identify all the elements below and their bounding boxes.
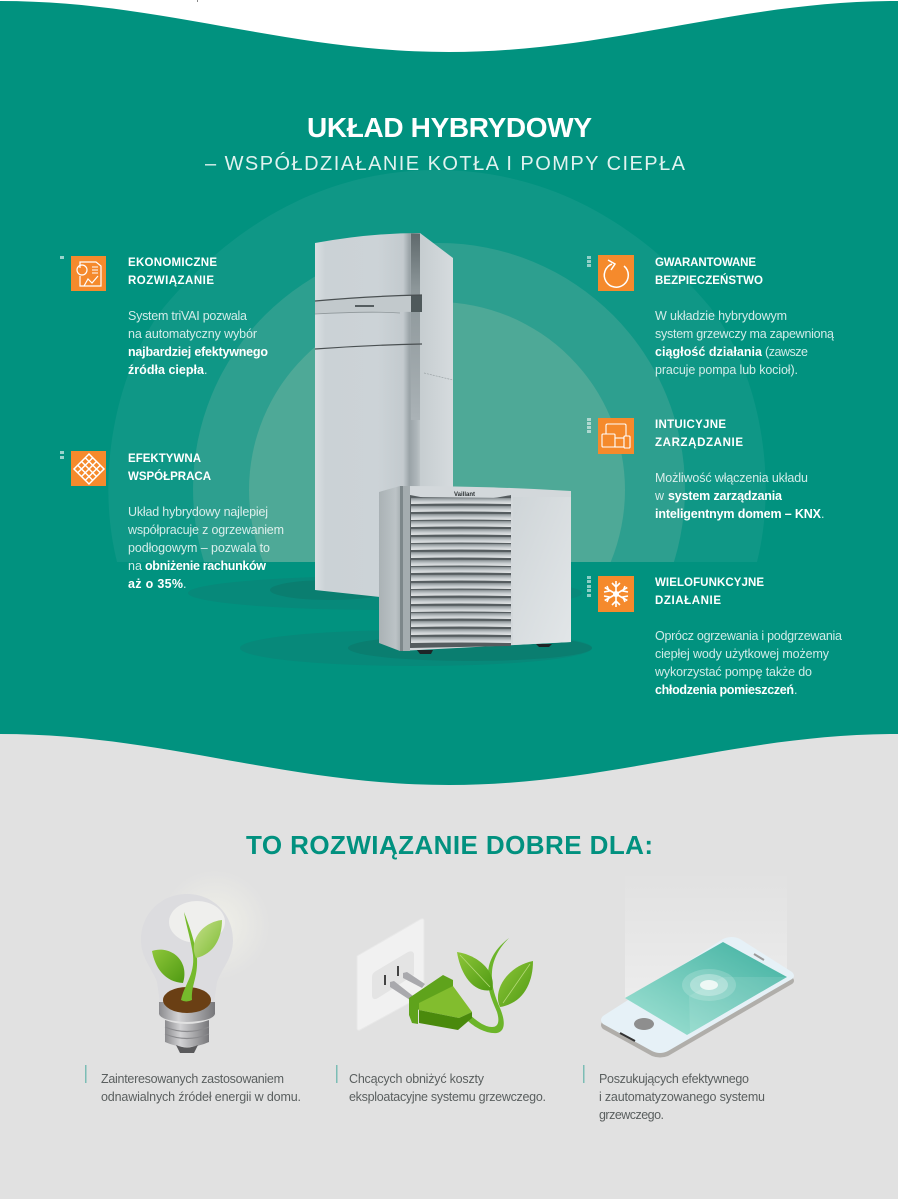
text block: ciepłej wody użytkowej możemy [655, 647, 830, 661]
text block: (zawsze [765, 345, 808, 359]
text block: automated system: Poszukujących efektywnego [599, 1072, 749, 1086]
text block [654, 629, 842, 697]
text block: współpracuje z ogrzewaniem [127, 523, 284, 537]
text block: obniżenie rachunków [145, 559, 266, 573]
text block: źródła ciepła [128, 363, 205, 377]
heading [128, 257, 217, 287]
heading: DZIAŁANIE [655, 595, 721, 607]
text block: wykorzystać pompę także do [654, 665, 812, 679]
text block: aż o 35% [128, 577, 183, 591]
text block: W układzie hybrydowym [655, 309, 787, 323]
heading: good for: TO ROZWIĄZANIE DOBRE DLA: [246, 830, 653, 860]
text block: najbardziej efektywnego [128, 345, 268, 359]
text block: Możliwość włączenia układu [655, 471, 808, 485]
text block: podłogowym – pozwala to [128, 541, 270, 555]
text block: renewable energy: odnawialnych źródeł energii w domu. [101, 1090, 301, 1104]
boiler unit [315, 233, 453, 600]
icon: snowflake [587, 576, 634, 612]
text block [654, 471, 824, 521]
icon: floor heating grid [60, 451, 106, 486]
text block: pracuje pompa lub kocioł). [655, 363, 798, 377]
text block: chłodzenia pomieszczeń [655, 683, 794, 697]
panel: green hybrid system section [0, 0, 898, 785]
text block: automated system [583, 1065, 765, 1122]
heading [655, 419, 743, 449]
text block: . [794, 683, 797, 697]
text block [655, 309, 834, 377]
text block [128, 309, 268, 377]
text block: renewable energy: Zainteresowanych zastosowaniem [101, 1072, 284, 1086]
heat pump unit [379, 486, 571, 654]
text block: Oprócz ogrzewania i podgrzewania [655, 629, 842, 643]
title [205, 112, 686, 175]
text block: w [654, 489, 665, 503]
title: – WSPÓŁDZIAŁANIE KOTŁA I POMPY CIEPŁA [205, 152, 686, 175]
text block: system grzewczy ma zapewnioną [655, 327, 834, 341]
icon: document with charts [60, 256, 106, 291]
concentric background arcs [108, 170, 766, 562]
text block: automated system: grzewczego. [599, 1108, 664, 1122]
heading: WIELOFUNKCYJNE [655, 577, 764, 589]
panel: multifunctional operation [587, 576, 842, 697]
icon: light bulb with plant [141, 870, 270, 1053]
panel: intuitive management [587, 418, 824, 521]
text block: ciągłość działania [655, 345, 763, 359]
panel: guaranteed safety [587, 255, 834, 377]
heading: WSPÓŁPRACA [128, 470, 211, 483]
text block: lower costs: Chcących obniżyć koszty [349, 1072, 485, 1086]
floor shadows [188, 576, 592, 666]
text block: . [821, 507, 824, 521]
text block: system zarządzania [668, 489, 783, 503]
heading: BEZPIECZEŃSTWO [655, 274, 763, 287]
text block: lower costs: eksploatacyjne systemu grzewczego. [349, 1090, 546, 1104]
text block [127, 505, 284, 591]
heading: GWARANTOWANE [655, 257, 756, 269]
text block: . [183, 577, 186, 591]
heading [655, 257, 763, 287]
heading: INTUICYJNE [655, 419, 726, 431]
panel: effective cooperation [60, 451, 284, 591]
heading: ZARZĄDZANIE [655, 437, 743, 449]
heading [128, 453, 211, 483]
heading: EKONOMICZNE [128, 257, 217, 269]
panel: economical solution [60, 256, 268, 377]
heading [655, 577, 764, 607]
text block: automated system: i zautomatyzowanego systemu [599, 1090, 765, 1104]
icon: circular arrow [587, 255, 634, 291]
icon: plug with leaves [357, 919, 533, 1033]
text block: Układ hybrydowy najlepiej [128, 505, 268, 519]
text block: renewable energy [85, 1065, 301, 1104]
text block: na [128, 559, 142, 573]
text block: . [204, 363, 207, 377]
white top wave [0, 0, 898, 52]
text block: lower costs [336, 1065, 546, 1104]
title: UKŁAD HYBRYDOWY [307, 112, 592, 143]
heading: ROZWIĄZANIE [128, 275, 214, 287]
heading: EFEKTYWNA [128, 453, 201, 465]
text block: na automatyczny wybór [128, 327, 257, 341]
icon: smartphone [601, 870, 794, 1058]
text block: System triVAI pozwala [128, 309, 247, 323]
icon: devices [587, 418, 634, 454]
heat pump unit: Vaillant [454, 492, 475, 498]
text block: inteligentnym domem – KNX [655, 507, 822, 521]
